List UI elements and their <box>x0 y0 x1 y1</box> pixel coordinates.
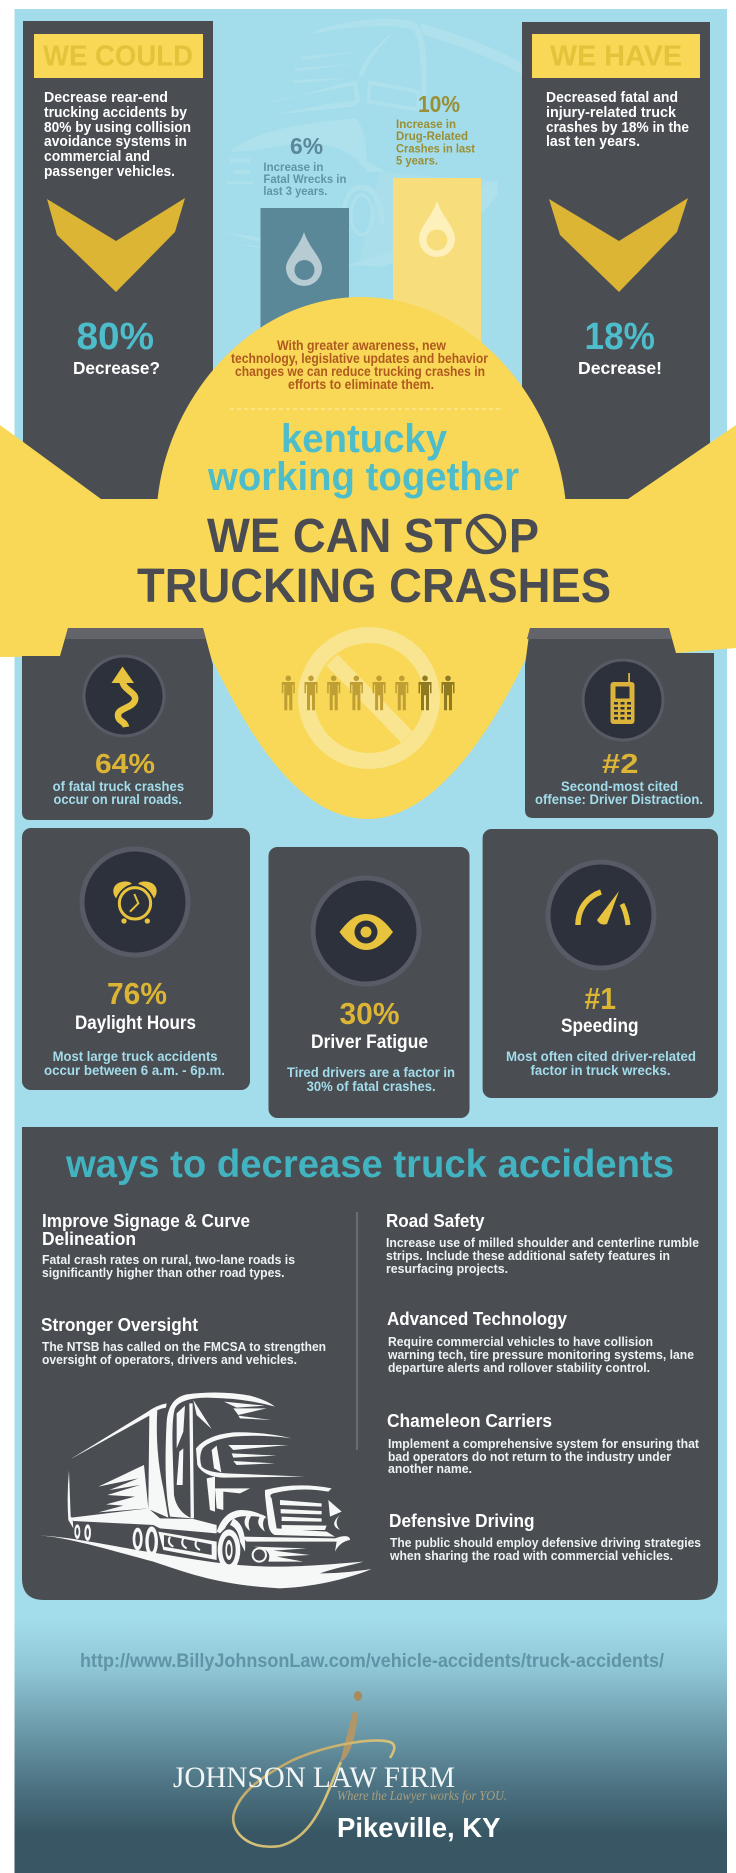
stat text: of fatal truck crashes <box>53 779 184 794</box>
intro paragraph: technology, legislative updates and behavior <box>231 351 489 366</box>
illustration: white truck <box>35 1392 372 1588</box>
icon: no people <box>282 635 454 761</box>
label: 10 percent: Increase in <box>396 117 456 131</box>
intro paragraph <box>231 338 489 392</box>
source url: http://www.BillyJohnsonLaw.com/vehicle-accidents/truck-accidents/ <box>80 1651 665 1672</box>
item: defensive driving: Defensive Driving <box>389 1511 534 1531</box>
item: chameleon carriers: another name. <box>388 1462 472 1476</box>
stat: 80 percent: 80% <box>76 316 154 358</box>
panel: we have <box>522 22 710 501</box>
we have label <box>532 34 700 78</box>
we could text: passenger vehicles. <box>44 164 175 180</box>
icon: eye <box>313 878 419 984</box>
subtitle <box>207 417 519 499</box>
icon: alarm clock <box>82 849 188 955</box>
item: improve signage <box>42 1211 295 1280</box>
item: stronger oversight: Stronger Oversight <box>41 1315 198 1335</box>
intro paragraph: efforts to eliminate them. <box>288 377 434 392</box>
label: 10 percent: 5 years. <box>396 154 438 168</box>
panel heading: ways to decrease truck accidents <box>65 1143 674 1186</box>
icon: cell phone <box>583 660 663 740</box>
we have text: last ten years. <box>546 134 640 150</box>
yellow central circle and ribbon banner <box>0 297 736 819</box>
label: 6 percent: last 3 years. <box>263 184 327 198</box>
icon: winding road <box>84 656 164 736</box>
icon: down chevron <box>47 198 185 292</box>
stat text: Tired drivers are a factor in <box>287 1064 455 1080</box>
item: chameleon carriers: bad operators do not return to the industry under <box>388 1450 671 1464</box>
stat text: factor in truck wrecks. <box>530 1062 670 1078</box>
panel: daylight hours <box>22 828 250 1090</box>
tagline: Where the Lawyer works for YOU. <box>337 1789 507 1804</box>
stat text <box>506 1048 696 1078</box>
item: road safety <box>386 1211 699 1276</box>
item: chameleon carriers <box>387 1411 700 1476</box>
bar chart: crash increases <box>260 91 481 368</box>
stat text: occur between 6 a.m. - 6p.m. <box>44 1062 225 1078</box>
item: improve signage: Fatal crash rates on rural, two-lane roads is <box>42 1253 295 1267</box>
panel: we could <box>23 21 213 501</box>
item: improve signage: Delineation <box>42 1229 136 1249</box>
stat text: 30% of fatal crashes. <box>307 1078 436 1094</box>
label: 10 percent: 10% <box>418 91 460 117</box>
we have label: WE HAVE <box>550 41 682 73</box>
label: 6 percent <box>263 133 346 198</box>
item: stronger oversight: The NTSB has called on the FMCSA to strengthen <box>42 1340 326 1354</box>
location: Pikeville, KY <box>337 1812 501 1843</box>
stat heading: Speeding <box>561 1016 638 1037</box>
we have text: injury-related truck <box>546 105 677 121</box>
stat text: offense: Driver Distraction. <box>535 792 703 807</box>
item: advanced technology: Require commercial vehicles to have collision <box>388 1335 653 1349</box>
panel: speeding <box>483 829 718 1098</box>
item: improve signage: significantly higher than other road types. <box>42 1266 284 1280</box>
label: 6 percent: 6% <box>290 133 323 159</box>
subtitle: working together <box>207 455 519 499</box>
panel: ways to decrease truck accidents <box>22 1127 718 1600</box>
stat text: Second-most cited <box>561 779 678 794</box>
stat text <box>53 779 184 807</box>
we could text: 80% by using collision <box>44 120 191 136</box>
firm name: JOHNSON LAW FIRM <box>173 1761 455 1794</box>
stat text: occur on rural roads. <box>54 792 182 807</box>
item: road safety: resurfacing projects. <box>386 1262 508 1276</box>
item: road safety: Road Safety <box>386 1211 484 1231</box>
stat: 64 percent: 64% <box>95 748 155 779</box>
item: road safety: Increase use of milled shoulder and centerline rumble <box>386 1236 699 1250</box>
logo mark: gold j <box>233 1691 394 1847</box>
title: WE CAN ST <box>207 510 462 563</box>
we could label: WE COULD <box>43 41 193 73</box>
we could text: trucking accidents by <box>44 105 187 121</box>
item: stronger oversight <box>41 1315 326 1367</box>
item: defensive driving: when sharing the road with commercial vehicles. <box>389 1549 673 1563</box>
label: 6 percent: Increase in <box>263 160 323 174</box>
panel: driver distraction <box>525 628 714 818</box>
we have text: crashes by 18% in the <box>546 120 689 136</box>
label: 10 percent: Drug-Related <box>396 129 468 143</box>
stat: number 2: #2 <box>602 748 638 779</box>
stat label: Decrease! <box>578 358 662 378</box>
item: road safety: strips. Include these additional safety features in <box>386 1249 670 1263</box>
we could text: avoidance systems in <box>44 134 187 150</box>
item: stronger oversight: oversight of operators, drivers and vehicles. <box>42 1353 297 1367</box>
item: advanced technology: Advanced Technology <box>387 1309 567 1329</box>
icon: down chevron <box>549 198 688 292</box>
item: advanced technology: departure alerts and rollover stability control. <box>388 1361 650 1375</box>
intro paragraph: changes we can reduce trucking crashes in <box>235 364 485 379</box>
we could label <box>34 34 203 78</box>
stat: 30 percent: 30% <box>340 996 400 1031</box>
stat: 76 percent: 76% <box>107 976 167 1011</box>
icon: speedometer <box>548 862 654 968</box>
we could text: commercial and <box>44 149 150 165</box>
stat heading: Driver Fatigue <box>311 1032 428 1053</box>
item: defensive driving: The public should employ defensive driving strategies <box>390 1536 701 1550</box>
stat text: Most large truck accidents <box>53 1048 218 1064</box>
logo: johnson law firm <box>173 1691 507 1847</box>
panel: rural roads <box>22 628 213 820</box>
we could text <box>44 90 191 180</box>
title: TRUCKING CRASHES <box>137 560 611 613</box>
stat text <box>535 779 703 807</box>
label: 10 percent: Crashes in last <box>396 142 475 156</box>
item: advanced technology: warning tech, tire pressure monitoring systems, lane <box>387 1348 694 1362</box>
we have text: Decreased fatal and <box>546 90 678 106</box>
we have text <box>546 90 689 150</box>
item: advanced technology <box>387 1309 694 1375</box>
we could text: Decrease rear-end <box>44 90 168 106</box>
stat text: Most often cited driver-related <box>506 1048 696 1064</box>
title: P <box>509 510 539 563</box>
label: 10 percent <box>396 91 475 168</box>
bar: 6 percent <box>260 208 349 368</box>
subtitle: kentucky <box>281 417 448 461</box>
icon: stop sign O <box>468 516 504 552</box>
stat heading: Daylight Hours <box>75 1013 196 1034</box>
label: 6 percent: Fatal Wrecks in <box>263 172 346 186</box>
intro paragraph: With greater awareness, new <box>277 338 446 353</box>
stat: number 1: #1 <box>584 981 616 1016</box>
item: chameleon carriers: Chameleon Carriers <box>387 1411 552 1431</box>
item: chameleon carriers: Implement a comprehensive system for ensuring that <box>388 1437 700 1451</box>
ghost truck background illustration <box>223 19 522 267</box>
bar: 10 percent <box>393 178 481 368</box>
panel: driver fatigue <box>268 847 470 1118</box>
item: defensive driving <box>389 1511 701 1563</box>
stat text <box>44 1048 225 1078</box>
item: improve signage: Improve Signage & Curve <box>42 1211 250 1231</box>
stat label: Decrease? <box>73 358 160 378</box>
stat: 18 percent: 18% <box>584 316 655 358</box>
title <box>137 510 611 613</box>
stat text <box>287 1064 455 1094</box>
